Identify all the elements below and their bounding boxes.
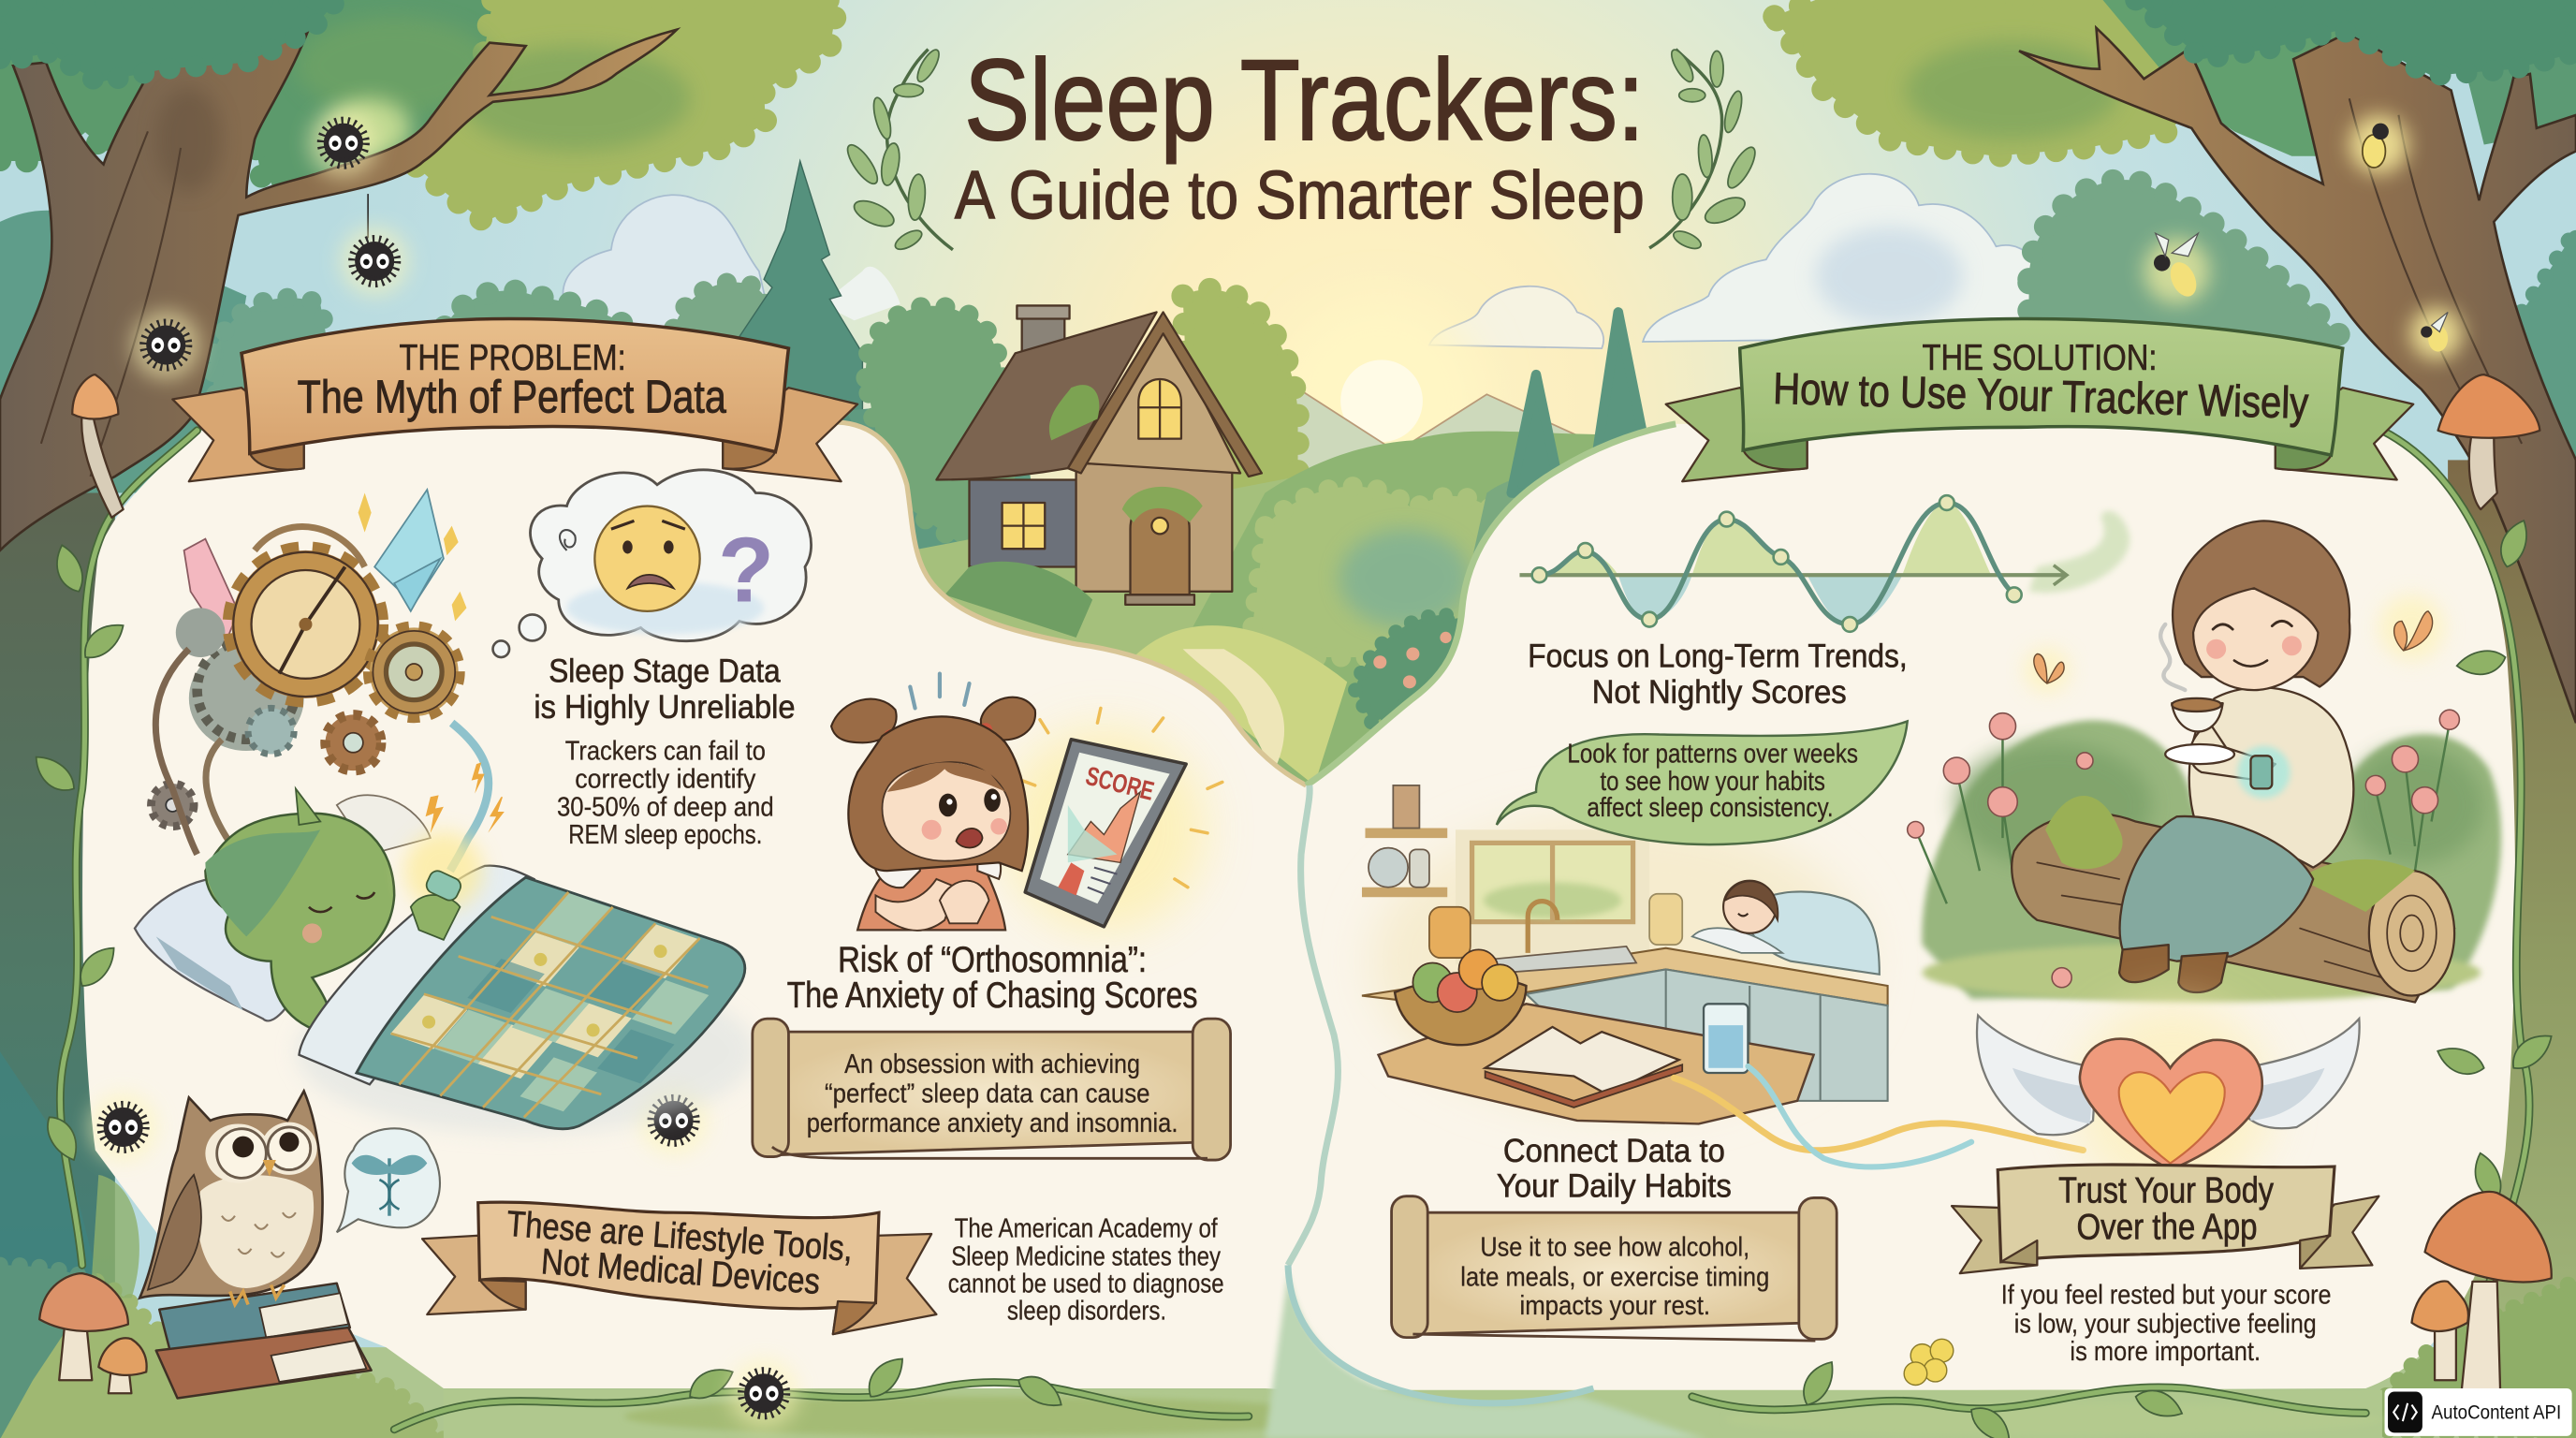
- text: subjective feeling: is low, your subjective feeling: [2014, 1309, 2317, 1339]
- scroll: orthosomnia text: [753, 1019, 1231, 1160]
- text: sleep stage data: Trackers can fail to: [565, 737, 766, 767]
- leaf callout: [1497, 721, 1908, 844]
- laurel, right: [1649, 47, 1760, 252]
- text: american academy: sleep disorders.: [1007, 1296, 1166, 1326]
- text: connect data: [1497, 1133, 1732, 1205]
- text: sleep stage data: REM sleep epochs.: [568, 820, 762, 850]
- title: A Guide to Smarter Sleep: [955, 155, 1645, 233]
- illustration: anxious girl: [831, 674, 1035, 931]
- clouds: [563, 174, 2047, 348]
- banner: the solution: THE SOLUTION:: [1922, 338, 2157, 378]
- sun and mountains: [1281, 302, 1660, 592]
- illustration: person sitting on log: [2012, 521, 2454, 1003]
- illustration: sleeping goblin under quilt: [135, 762, 755, 1134]
- text: subjective feeling: [2001, 1281, 2331, 1367]
- banner: lifestyle tools: Not Medical Devices: [540, 1241, 821, 1302]
- forest around cottage: [846, 289, 1692, 788]
- flowing data ribbons: [1674, 1066, 2083, 1167]
- text: long-term trends: Focus on Long-Term Trends,: [1528, 638, 1908, 675]
- laurel, left: [842, 47, 953, 253]
- illustration: kitchen with sleeper: [1362, 785, 1888, 1123]
- illustration: garden behind person on log: [1908, 710, 2501, 1003]
- scroll: orthosomnia text: An obsession with achieving: [844, 1049, 1140, 1079]
- icon: winged heart: [1977, 1003, 2360, 1199]
- fireflies: [2144, 115, 2463, 360]
- leaf callout: Look for patterns over weeks: [1567, 739, 1858, 769]
- text: american academy: cannot be used to diagnose: [948, 1269, 1224, 1299]
- watermark badge: [2385, 1388, 2572, 1436]
- text: orthosomnia heading: The Anxiety of Chasing Scores: [787, 976, 1197, 1016]
- text: american academy: The American Academy of: [955, 1214, 1218, 1244]
- icon: clockwork gears and crystals: [151, 490, 489, 871]
- left tree trunk: [0, 30, 677, 550]
- illustration: tablet with score: SCORE: [1083, 761, 1157, 806]
- cream parchment panels: [82, 422, 2515, 1393]
- text: sleep stage data: is Highly Unreliable: [534, 689, 795, 726]
- text: sleep stage data: correctly identify: [575, 765, 756, 795]
- icon: yellow flower: [1904, 1339, 1954, 1385]
- text: american academy: [948, 1214, 1224, 1326]
- right tree: [1775, 0, 2576, 723]
- icon: worried thought bubble: [493, 470, 812, 657]
- text: american academy: Sleep Medicine states they: [951, 1241, 1221, 1271]
- scroll: daily habits text: [1392, 1196, 1837, 1341]
- banner: trust your body: [1952, 1165, 2378, 1273]
- mushrooms, bottom left: [39, 1273, 147, 1393]
- banner: lifestyle tools: These are Lifestyle Tools,: [505, 1204, 854, 1269]
- banner: the problem: [172, 318, 857, 481]
- text: orthosomnia heading: [787, 940, 1197, 1016]
- watermark badge: AutoContent API: [2432, 1401, 2561, 1423]
- vines: [28, 431, 2557, 1438]
- mushrooms, left top: [72, 374, 124, 518]
- distant forest, left: [0, 211, 772, 493]
- title: [955, 37, 1645, 233]
- illustration: tablet with score: [1003, 708, 1222, 932]
- text: subjective feeling: is more important.: [2070, 1337, 2261, 1367]
- mushrooms, right top: [2438, 374, 2539, 509]
- ground and moss, bottom corners: [0, 1051, 2576, 1438]
- left and right edge strips: [0, 460, 2576, 1438]
- text: long-term trends: [1528, 638, 1908, 711]
- title: Sleep Trackers:: [964, 37, 1645, 165]
- banner: trust your body: Trust Your Body: [2058, 1171, 2275, 1211]
- butterflies: [2024, 594, 2445, 694]
- icon: worried thought bubble: ?: [718, 518, 774, 621]
- leaf callout: to see how your habits: [1600, 767, 1825, 797]
- scroll: daily habits text: Use it to see how alcohol,: [1480, 1233, 1749, 1263]
- left tree: [0, 0, 838, 550]
- chart: sleep trend wave: [1519, 495, 2130, 632]
- banner: the problem: THE PROBLEM:: [399, 338, 626, 378]
- text: connect data: Connect Data to: [1503, 1133, 1725, 1169]
- scroll: orthosomnia text: performance anxiety and insomnia.: [807, 1108, 1178, 1138]
- text: sleep stage data: Sleep Stage Data: [549, 653, 781, 689]
- text: orthosomnia heading: Risk of “Orthosomnia”:: [838, 940, 1147, 980]
- scroll: daily habits text: late meals, or exercise timing: [1460, 1262, 1769, 1292]
- text: sleep stage data: 30-50% of deep and: [557, 792, 774, 822]
- banner: the solution: How to Use Your Tracker Wisely: [1773, 364, 2309, 429]
- speech bubble: caduceus: [337, 1128, 440, 1232]
- right tree trunk: [2019, 28, 2576, 723]
- leaf callout: affect sleep consistency.: [1587, 793, 1834, 823]
- conifer tree, left: [736, 161, 862, 444]
- soot sprites: [89, 109, 798, 1428]
- banner: lifestyle tools: [422, 1202, 936, 1334]
- text: subjective feeling: If you feel rested but your score: [2001, 1281, 2331, 1311]
- cottage: [936, 305, 1262, 638]
- text: sleep stage data: [534, 653, 795, 850]
- banner: the problem: The Myth of Perfect Data: [298, 373, 726, 423]
- stream dividing the panels: [1265, 785, 1708, 1438]
- banner: trust your body: Over the App: [2076, 1207, 2258, 1247]
- scroll: orthosomnia text: “perfect” sleep data can cause: [825, 1079, 1150, 1109]
- text: long-term trends: Not Nightly Scores: [1592, 674, 1847, 711]
- text: connect data: Your Daily Habits: [1497, 1168, 1732, 1205]
- mushrooms, right bottom: [2411, 1192, 2552, 1397]
- scroll: daily habits text: impacts your rest.: [1519, 1291, 1710, 1321]
- illustration: owl on books: [139, 1091, 372, 1399]
- flowering bush by the path: [1355, 615, 1466, 723]
- banner: the solution: [1666, 318, 2413, 481]
